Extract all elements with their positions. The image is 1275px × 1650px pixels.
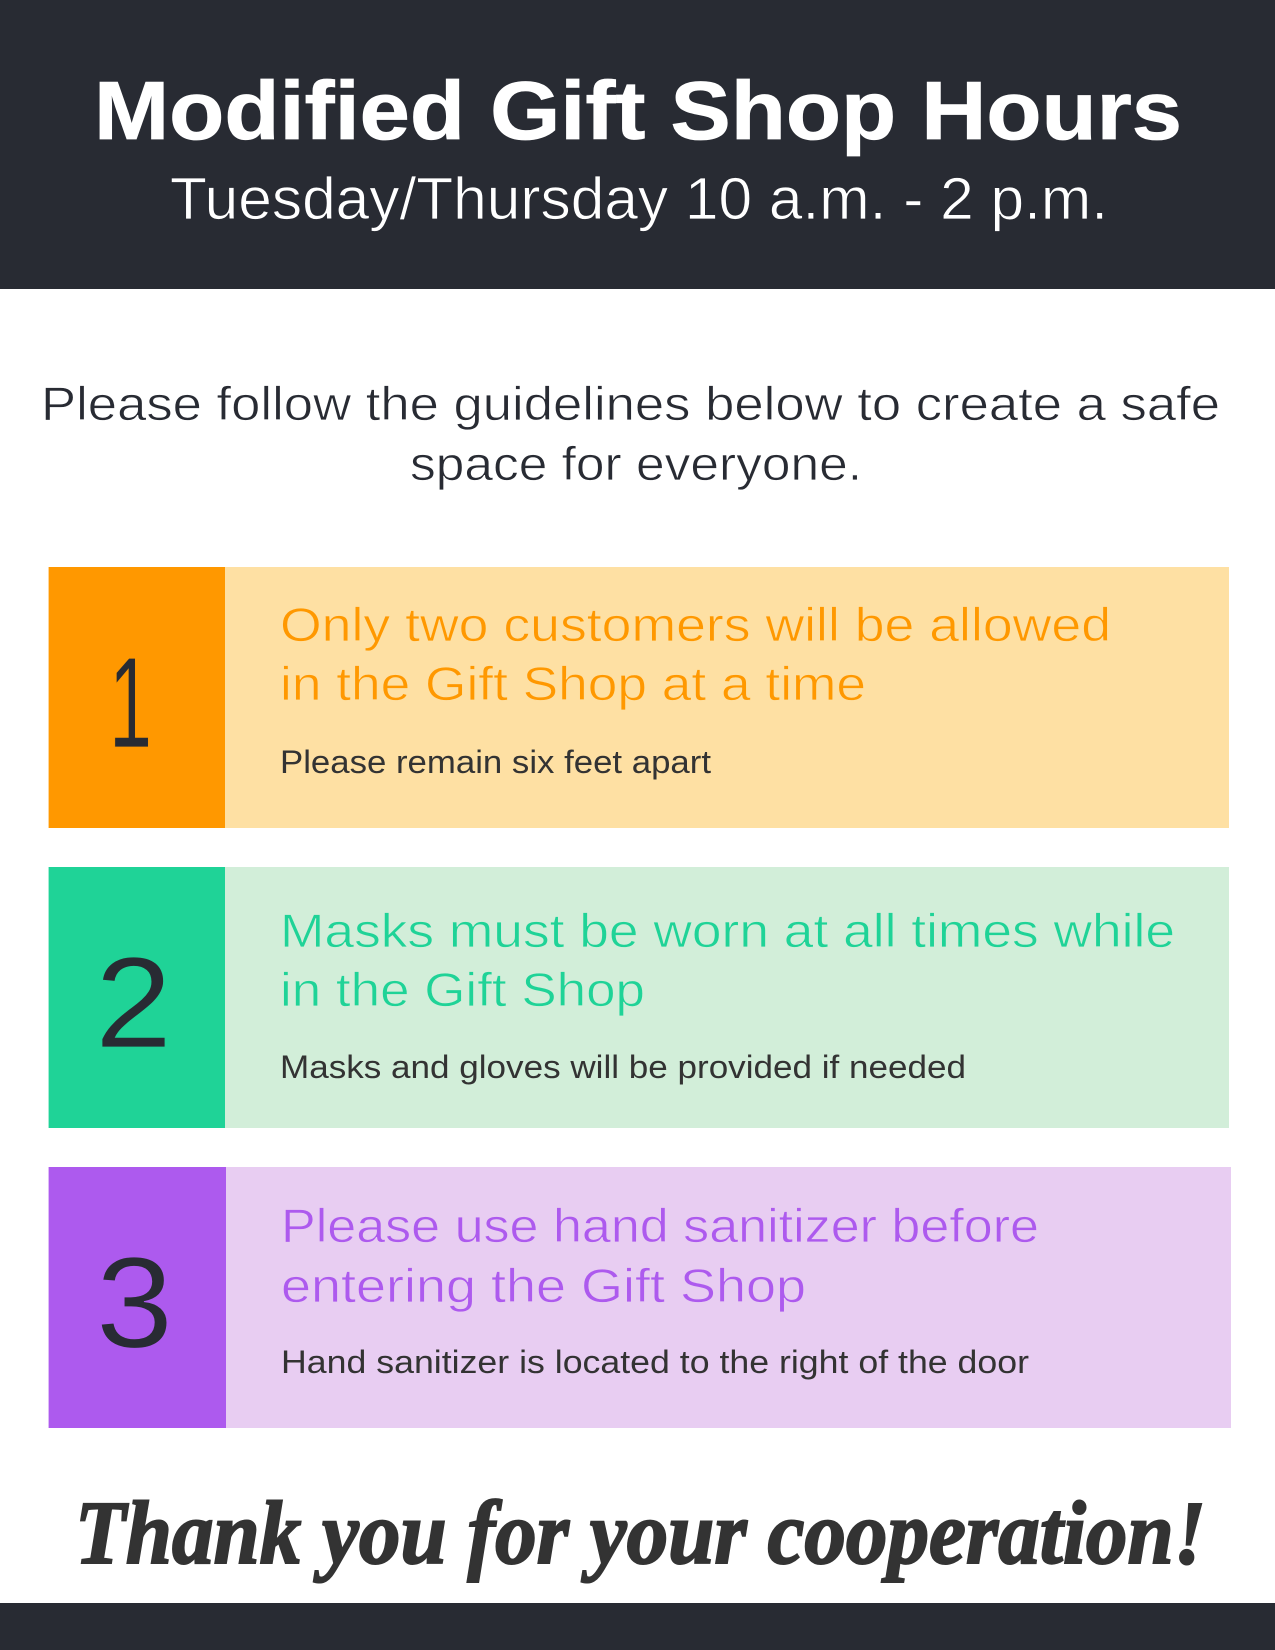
title: Modified Gift Shop Hours xyxy=(94,64,1182,157)
number tile 1 xyxy=(49,567,225,828)
number tile 2: 2 xyxy=(95,931,172,1075)
guideline 1 note: Please remain six feet apart xyxy=(280,744,711,780)
guideline 3 heading: Please use hand sanitizer before xyxy=(281,1199,1039,1252)
intro text xyxy=(41,377,1220,490)
guideline 2 heading xyxy=(280,904,1175,1016)
guideline 3 note: Hand sanitizer is located to the right of the door xyxy=(281,1344,1029,1380)
intro text: space for everyone. xyxy=(410,437,862,490)
header band xyxy=(0,0,1275,289)
guideline 1 heading: in the Gift Shop at a time xyxy=(280,657,866,710)
footer band xyxy=(0,1603,1275,1650)
number tile 3 xyxy=(49,1167,226,1428)
panel: guideline 2 xyxy=(49,867,1229,1128)
guideline 2 heading: Masks must be worn at all times while xyxy=(280,904,1175,957)
panel: guideline 3 xyxy=(49,1167,1231,1428)
guideline 1 heading: Only two customers will be allowed xyxy=(280,598,1111,651)
number tile 2 xyxy=(49,867,225,1128)
panel: guideline 1 xyxy=(49,567,1229,828)
guideline 2 heading: in the Gift Shop xyxy=(280,963,645,1016)
guideline 3 heading: entering the Gift Shop xyxy=(281,1259,806,1312)
guideline 3 heading xyxy=(281,1199,1039,1312)
guideline 2 note: Masks and gloves will be provided if needed xyxy=(280,1049,966,1085)
intro text: Please follow the guidelines below to create a safe xyxy=(41,377,1220,430)
number tile 3: 3 xyxy=(96,1231,173,1375)
guideline 1 heading xyxy=(280,598,1111,710)
number tile 1: 1 xyxy=(109,631,152,775)
subtitle: hours: Tuesday/Thursday 10 a.m. - 2 p.m. xyxy=(170,166,1108,232)
closing message: Thank you for your cooperation! xyxy=(75,1484,1206,1583)
